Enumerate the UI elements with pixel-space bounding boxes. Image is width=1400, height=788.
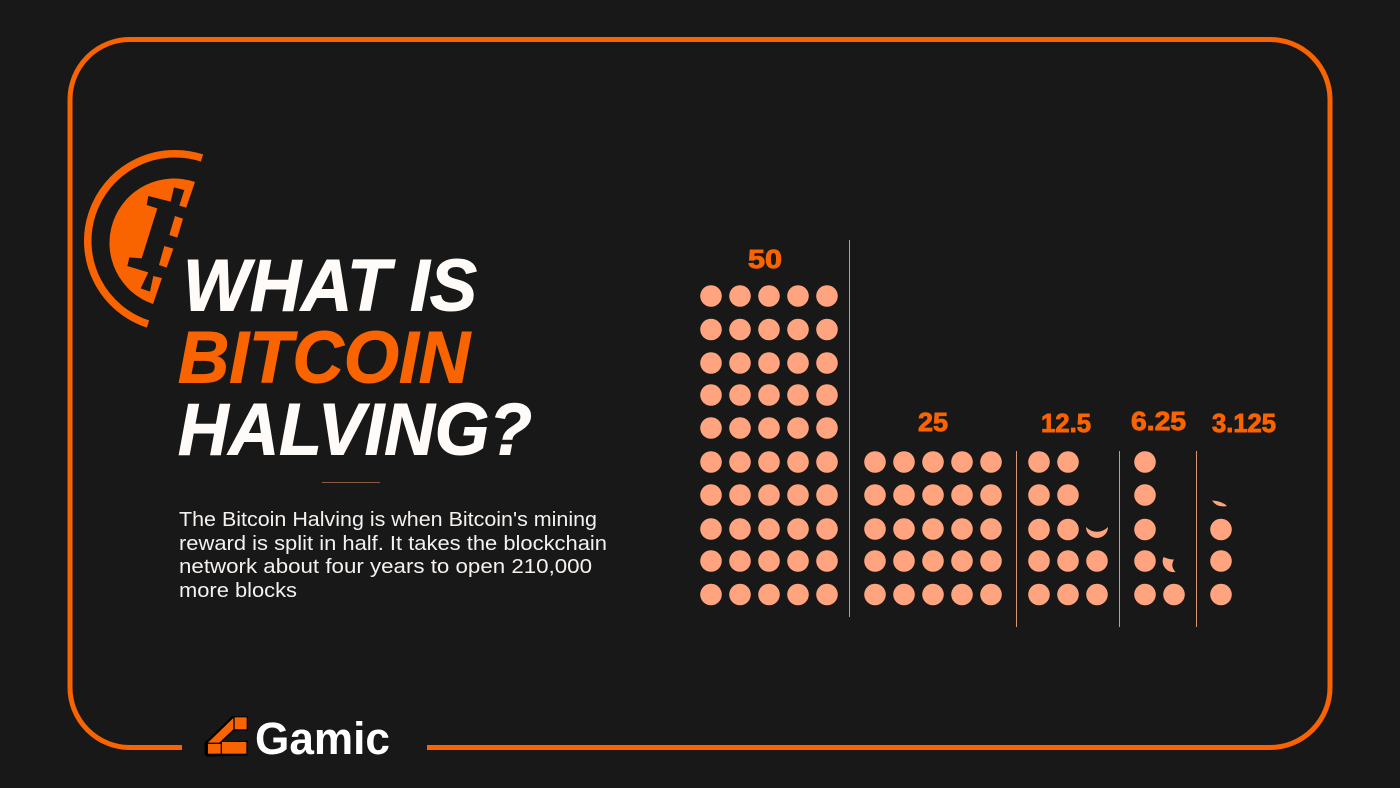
logo: Gamic: [205, 713, 390, 764]
column: reward 12.5: 12.5: [1041, 408, 1091, 438]
column: reward 3.125: [1210, 408, 1276, 605]
title: BITCOIN: [178, 318, 471, 398]
wordmark: Gamic: [255, 713, 390, 764]
column: reward 6.25: 6.25: [1131, 406, 1186, 436]
description text: reward is split in half. It takes the blockchain: [179, 533, 607, 555]
description text: more blocks: [179, 580, 297, 602]
description text: network about four years to open 210,000: [179, 556, 592, 578]
chart: halving reward coin columns: [700, 240, 1276, 627]
divider 50 / 25: [849, 240, 850, 617]
divider 6.25 / 3.125: [1196, 451, 1197, 627]
column: reward 50: 50: [748, 244, 782, 274]
title: HALVING?: [178, 390, 532, 470]
column: reward 25: 25: [918, 407, 948, 437]
title divider: [322, 482, 380, 483]
divider 25 / 12.5: [1016, 451, 1017, 627]
icon: Gamic blocks: [205, 716, 248, 757]
column: reward 12.5: [1028, 408, 1108, 605]
divider 12.5 / 6.25: [1119, 451, 1120, 627]
title: WHAT IS: [183, 246, 477, 326]
description text: The Bitcoin Halving is when Bitcoin's mining: [179, 509, 597, 531]
icon: half bitcoin coin: [88, 154, 203, 324]
column: reward 3.125: 3.125: [1212, 408, 1276, 438]
title: [178, 246, 532, 470]
description text: [179, 509, 607, 602]
column: reward 50: [700, 244, 838, 605]
column: reward 25: [864, 407, 1002, 605]
column: reward 6.25: [1131, 406, 1186, 605]
